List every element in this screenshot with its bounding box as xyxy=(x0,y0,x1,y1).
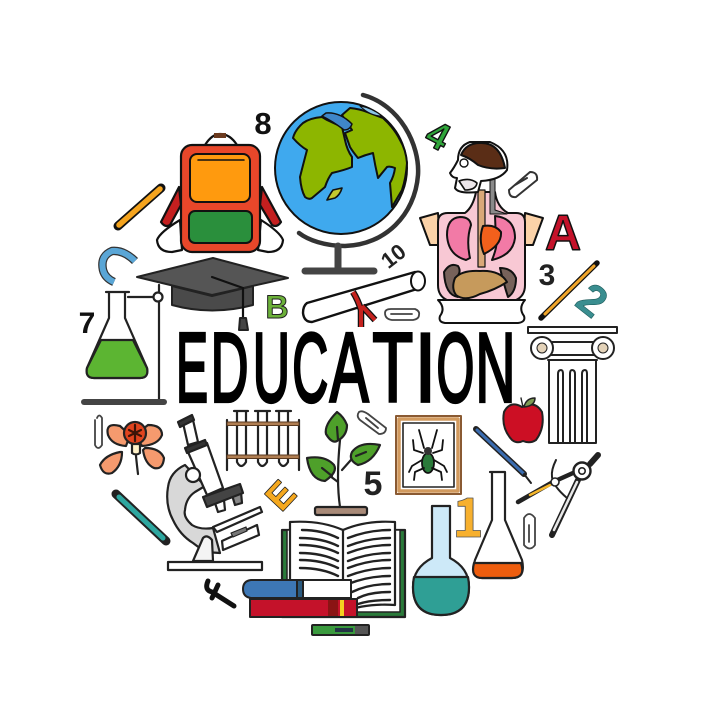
icon: pen xyxy=(476,429,531,483)
title: O xyxy=(436,314,474,423)
icon: paperclip xyxy=(524,514,535,548)
number 10: 10 xyxy=(376,239,411,273)
icon: globe xyxy=(275,95,418,271)
icon: anatomy torso xyxy=(420,142,543,323)
title: E xyxy=(176,314,208,423)
icon: diploma scroll xyxy=(303,272,425,327)
icon: paperclip xyxy=(95,416,102,448)
icon: small green book xyxy=(312,625,369,635)
title: C xyxy=(292,314,328,423)
icon: paperclip xyxy=(358,411,386,434)
icon: erlenmeyer flask on stand xyxy=(84,285,164,402)
icon: backpack xyxy=(157,133,283,252)
icon: caliper xyxy=(207,581,234,606)
icon: open book xyxy=(282,522,405,617)
letter A: A xyxy=(545,205,581,261)
letter E: E xyxy=(257,473,304,518)
icon: graduation cap xyxy=(137,258,288,330)
icon: orange erlenmeyer flask xyxy=(473,472,523,578)
icon: drafting compass xyxy=(518,455,598,535)
number 7: 7 xyxy=(79,307,95,340)
title: T xyxy=(372,312,413,422)
icon: framed beetle xyxy=(396,416,461,494)
icon: teal bar xyxy=(116,494,166,541)
icon: yellow ruler xyxy=(118,188,161,226)
number 8: 8 xyxy=(254,106,272,141)
title: I xyxy=(414,313,436,422)
title: U xyxy=(253,312,290,423)
icon: ionic column xyxy=(528,327,617,443)
number 2: 2 xyxy=(567,274,617,327)
icon: letter C xyxy=(102,251,135,282)
icon: plant xyxy=(307,412,380,515)
icon: paperclip xyxy=(509,172,537,197)
icon: microscope xyxy=(167,415,262,570)
letter B: B xyxy=(265,289,289,325)
icon: pencil xyxy=(541,263,597,318)
number 3: 3 xyxy=(539,259,555,292)
icon: stacked books xyxy=(243,580,357,617)
icon: round bottom flask xyxy=(413,506,469,615)
icon: apple xyxy=(503,398,543,442)
icon: orchid flower xyxy=(100,422,164,474)
number 5: 5 xyxy=(364,465,382,503)
title: D xyxy=(211,313,248,422)
title: N xyxy=(476,313,515,422)
icon: paperclip xyxy=(385,309,419,320)
number 1: 1 xyxy=(452,474,484,553)
icon: letter 4: 4 xyxy=(418,113,457,160)
title xyxy=(176,312,515,423)
icon: test tube rack xyxy=(227,411,299,470)
title: A xyxy=(330,314,369,423)
